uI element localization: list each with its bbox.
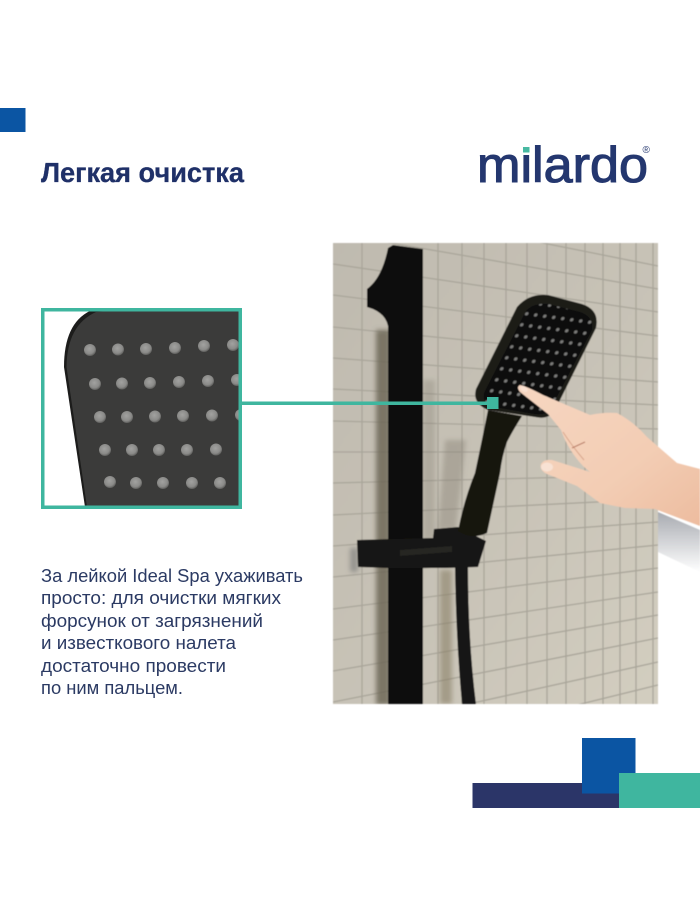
title: Легкая очистка [41, 157, 244, 188]
body text: просто: для очистки мягких [41, 588, 281, 608]
logo: milardo: milardo [477, 137, 648, 193]
photo: shower on tiled wall with hand [332, 242, 700, 705]
hand pointing at shower head [518, 385, 700, 526]
corner accent square [0, 108, 26, 132]
body text: За лейкой Ideal Spa ухаживать [41, 566, 303, 586]
cast shadows on wall [350, 330, 466, 705]
slider bracket [357, 527, 486, 568]
decorative corner blocks [472, 738, 700, 808]
rail bar with wall mount [367, 245, 423, 704]
inset frame [43, 310, 240, 507]
shower head close-up surface [64, 308, 247, 507]
logo: milardo: ® [642, 145, 650, 156]
body text: достаточно провести [41, 656, 226, 676]
connector end marker [487, 397, 498, 409]
shower hose [455, 566, 476, 704]
shower handle [458, 410, 522, 536]
body text: и известкового налета [41, 633, 237, 653]
tiled wall [332, 242, 658, 705]
nozzles [84, 339, 247, 489]
body text: форсунок от загрязнений [41, 611, 263, 631]
body text: по ним пальцем. [41, 678, 183, 698]
connector line from inset to shower head [242, 397, 498, 409]
inset: nozzle close-up [42, 308, 247, 508]
off-photo hand shadow [658, 512, 700, 572]
shower head [475, 295, 597, 418]
body text [41, 566, 303, 698]
